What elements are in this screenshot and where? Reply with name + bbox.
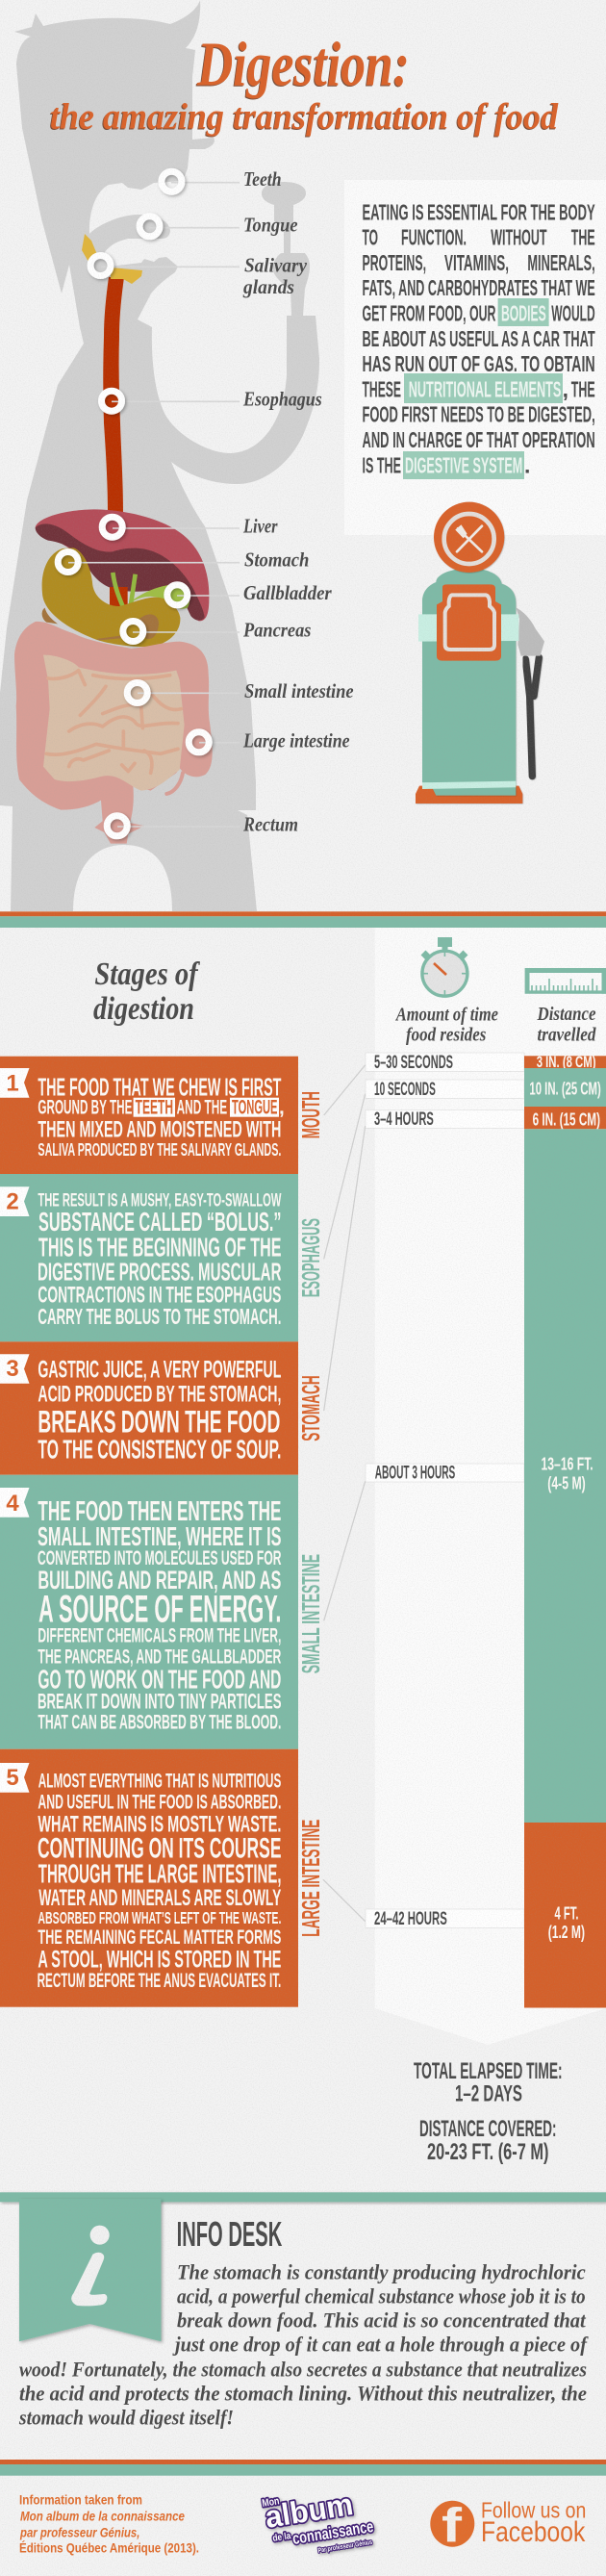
callout rings	[58, 171, 209, 836]
salivary glands	[82, 234, 142, 284]
pump light stripe	[418, 614, 518, 642]
intro paragraph: VITAMINS,	[444, 250, 509, 275]
flag number 3: 3	[6, 1356, 19, 1382]
vertical stage labels: ESOPHAGUS	[298, 1218, 325, 1297]
organ labels: Stomach	[244, 548, 309, 571]
segment 13-16 ft: (4-5 M)	[547, 1473, 586, 1492]
chart: distance column	[524, 1053, 606, 2007]
fork and knife	[456, 525, 482, 551]
source credit: Information taken from	[19, 2492, 142, 2508]
heading: stages of digestion	[93, 956, 201, 1027]
row 5-30 seconds: 5–30 SECONDS	[374, 1053, 453, 1073]
segment 4 ft: (1.2 M)	[548, 1923, 585, 1942]
silhouette body	[0, 0, 319, 911]
title line 2: the amazing transformation of food	[50, 96, 559, 137]
flag number 5: 5	[6, 1765, 19, 1791]
segment 4 ft: 4 FT.	[554, 1903, 579, 1923]
segment 13-16 ft	[524, 1129, 606, 1823]
esophagus	[103, 277, 124, 515]
flag number 2	[0, 1186, 29, 1216]
stage 3 text: ACID PRODUCED BY THE STOMACH,	[38, 1382, 281, 1408]
stage 1 text: ,	[279, 1097, 285, 1119]
flag number 3	[0, 1354, 29, 1384]
organ labels: glands	[242, 275, 294, 298]
info paragraph: break down food. This acid is so concentrated that	[177, 2308, 587, 2332]
fork	[262, 182, 306, 253]
info paragraph: the acid and protects the stomach lining. Without this neutralizer, the	[19, 2381, 587, 2405]
icon: facebook: f	[442, 2499, 462, 2553]
organ callout lines	[68, 183, 240, 827]
info paragraph: stomach would digest itself!	[18, 2405, 234, 2429]
large intestine	[14, 622, 213, 844]
intro paragraph: IS THE	[362, 452, 401, 477]
organ labels: Rectum	[242, 812, 298, 835]
icon: gas pump	[416, 502, 544, 803]
highlight: bodies	[498, 298, 549, 326]
source credit: par professeur Génius,	[19, 2525, 139, 2540]
stage 4 text: THAT CAN BE ABSORBED BY THE BLOOD.	[38, 1712, 281, 1734]
stage 2 text: SUBSTANCE CALLED “BOLUS.”	[38, 1207, 281, 1237]
stomach	[42, 548, 180, 647]
logo: Mon album de la connaissance: de la	[272, 2531, 292, 2544]
pump bottle outline	[445, 595, 494, 650]
title	[50, 29, 559, 137]
stage 1 text: THE FOOD THAT WE CHEW IS FIRST	[38, 1074, 282, 1101]
info paragraph	[18, 2259, 589, 2429]
stage 1 text	[38, 1074, 285, 1160]
column heading: time: food resides	[406, 1025, 487, 1046]
facebook text: Facebook	[481, 2516, 586, 2548]
vertical stage labels: STOMACH	[298, 1375, 325, 1441]
stage 3 text	[38, 1357, 281, 1465]
intro paragraph: PROTEINS,	[362, 250, 426, 275]
heading: stages of digestion: digestion	[93, 991, 194, 1027]
icon: stopwatch	[421, 937, 467, 996]
organ labels: Tongue	[243, 214, 298, 237]
stage 5 text: ABSORBED FROM WHAT’S LEFT OF THE WASTE.	[38, 1908, 281, 1927]
stage 3 text: BREAKS DOWN THE FOOD	[38, 1404, 280, 1439]
organ labels: Salivary	[244, 254, 308, 277]
organ labels: Liver	[242, 514, 278, 537]
stage 4 text: THE PANCREAS, AND THE GALLBLADDER	[38, 1645, 281, 1668]
intro paragraph: THESE	[362, 376, 401, 401]
hand	[272, 253, 310, 316]
stage 3 text: GASTRIC JUICE, A VERY POWERFUL	[38, 1357, 281, 1384]
intro paragraph	[362, 199, 595, 477]
organ labels: Gallbladder	[243, 581, 332, 604]
organ labels: Pancreas	[242, 619, 311, 642]
stage 5 text: ALMOST EVERYTHING THAT IS NUTRITIOUS	[38, 1771, 281, 1793]
stage 5 text: THE REMAINING FECAL MATTER FORMS	[38, 1926, 281, 1949]
flag number 1: 1	[6, 1070, 19, 1096]
pump base	[416, 786, 522, 803]
esophagus lower part	[110, 587, 128, 608]
logo: Mon album de la connaissance: Par professeur Génius	[317, 2539, 373, 2555]
stage 4 text	[38, 1496, 281, 1734]
flag number 5	[0, 1763, 29, 1793]
panel: time column background	[375, 928, 606, 2045]
column heading: distance	[537, 1004, 596, 1046]
intro paragraph: .	[524, 452, 530, 477]
totals	[414, 2058, 563, 2165]
source credit	[19, 2492, 199, 2556]
stage 4 text: A SOURCE OF ENERGY.	[38, 1589, 281, 1631]
highlight: digestive system	[403, 451, 524, 479]
follow text: Follow us on	[481, 2498, 586, 2523]
organ labels: Large intestine	[242, 729, 350, 752]
panel: stage 2 esophagus	[0, 1174, 298, 1341]
panel: stage 5 large intestine	[0, 1749, 298, 2007]
column heading: distance: Distance	[537, 1004, 596, 1025]
stage 5 text: A STOOL, WHICH IS STORED IN THE	[38, 1947, 281, 1973]
stage 4 text: BUILDING AND REPAIR, AND AS	[38, 1565, 281, 1594]
panel: digestive organs	[14, 234, 213, 844]
icon: ruler	[525, 968, 606, 994]
row 24-42 hours: 24–42 HOURS	[374, 1909, 447, 1929]
highlight: teeth	[134, 1098, 175, 1117]
segment 10 in	[524, 1068, 606, 1107]
panel: info desk	[0, 2192, 606, 2429]
organ labels: Small intestine	[244, 679, 354, 702]
small intestine	[43, 655, 185, 791]
organ labels	[242, 167, 354, 835]
highlight: nutritional elements	[404, 373, 563, 403]
stage 1 text: TONGUE	[232, 1097, 278, 1119]
stage 4 text: GO TO WORK ON THE FOOD AND	[38, 1664, 281, 1694]
stage 2 text: THIS IS THE BEGINNING OF THE	[38, 1233, 281, 1262]
gallbladder	[133, 582, 189, 609]
stage 1 text: THEN MIXED AND MOISTENED WITH	[38, 1117, 281, 1143]
stage 1 text: TEETH	[136, 1097, 173, 1119]
row about 3 hours: ABOUT 3 HOURS	[375, 1464, 455, 1484]
stage 1 text: SALIVA PRODUCED BY THE SALIVARY GLANDS.	[38, 1139, 281, 1160]
stage 2 text	[38, 1190, 282, 1329]
icon: letter i	[71, 2226, 110, 2306]
title line 1: Digestion:	[196, 29, 410, 100]
stage 2 text: CARRY THE BOLUS TO THE STOMACH.	[38, 1304, 281, 1329]
pump orange panel	[437, 584, 501, 661]
panel: stage 4 small intestine	[0, 1475, 298, 1749]
totals: 1–2 DAYS	[455, 2080, 522, 2106]
stage 1 text: GROUND BY THE	[38, 1097, 132, 1119]
logo: Mon album de la connaissance: connaissance	[291, 2517, 375, 2548]
info paragraph: The stomach is constantly producing hydrochloric	[177, 2259, 586, 2283]
stage 4 text: CONVERTED INTO MOLECULES USED FOR	[38, 1547, 281, 1569]
pump hose	[525, 657, 539, 777]
vertical stage labels	[298, 1091, 325, 1937]
pancreas	[42, 608, 159, 640]
stage 2 text: DIGESTIVE PROCESS. MUSCULAR	[38, 1258, 282, 1287]
chart: time rows	[366, 1053, 524, 1929]
facebook link	[430, 2498, 586, 2553]
highlight: tongue	[230, 1098, 279, 1117]
bile ducts	[113, 573, 136, 608]
stage 3 text: TO THE CONSISTENCY OF SOUP.	[38, 1435, 281, 1465]
organ labels: Teeth	[243, 167, 281, 191]
column heading: time	[394, 1005, 498, 1046]
liver	[36, 509, 209, 621]
pump bottom stripe	[422, 781, 516, 789]
panel: stage 1 mouth	[0, 1057, 298, 1174]
organs group	[14, 509, 213, 844]
info bar	[0, 2192, 606, 2202]
intro paragraph: FUNCTION.	[401, 225, 467, 250]
flag number 2: 2	[6, 1189, 19, 1215]
intro paragraph: GET FROM FOOD, OUR	[362, 300, 496, 325]
flag number 4	[0, 1488, 29, 1518]
stage 5 text: CONTINUING ON ITS COURSE	[38, 1833, 281, 1865]
stage 4 text: SMALL INTESTINE, WHERE IT IS	[38, 1521, 281, 1551]
vertical stage labels: SMALL INTESTINE	[298, 1554, 325, 1673]
row 3-4 hours: 3–4 HOURS	[374, 1109, 434, 1130]
intro paragraph: ,	[563, 376, 568, 401]
icon: facebook	[430, 2499, 474, 2553]
connector lines	[323, 1065, 366, 1922]
source credit: Éditions Québec Amérique (2013).	[19, 2540, 199, 2556]
section divider 2	[0, 2460, 606, 2476]
panel: introduction text	[344, 180, 606, 535]
flag number 4: 4	[6, 1491, 19, 1517]
stage 5 text: THROUGH THE LARGE INTESTINE,	[38, 1859, 281, 1889]
logo: Mon album de la connaissance	[262, 2487, 375, 2555]
stage 5 text: AND USEFUL IN THE FOOD IS ABSORBED.	[38, 1791, 281, 1813]
stage 2 text: CONTRACTIONS IN THE ESOPHAGUS	[38, 1282, 281, 1308]
stage 5 text: WATER AND MINERALS ARE SLOWLY	[38, 1885, 281, 1911]
stage 5 text: RECTUM BEFORE THE ANUS EVACUATES IT.	[38, 1970, 281, 1992]
source credit: Mon album de la connaissance	[20, 2508, 185, 2523]
intro paragraph: BODIES	[501, 300, 546, 325]
column heading: time: Amount of time	[394, 1005, 498, 1026]
stage 4 text: THE FOOD THEN ENTERS THE	[38, 1496, 281, 1527]
stage 5 text: WHAT REMAINS IS MOSTLY WASTE.	[38, 1811, 281, 1837]
panel: stage 3 stomach	[0, 1341, 298, 1475]
row 3-4 hours	[366, 1109, 524, 1130]
logo: Mon album de la connaissance: album	[263, 2487, 355, 2535]
stage 4 text: DIFFERENT CHEMICALS FROM THE LIVER,	[38, 1625, 281, 1647]
info heading: INFO DESK	[177, 2214, 282, 2254]
heading: stages of digestion: Stages of	[94, 956, 201, 992]
info ribbon	[19, 2199, 162, 2341]
intro panel background	[344, 180, 606, 535]
totals: 20-23 FT. (6-7 M)	[427, 2139, 548, 2165]
panel: human silhouette	[0, 0, 319, 911]
vertical stage labels: MOUTH	[298, 1091, 325, 1138]
intro paragraph: TO	[362, 225, 378, 250]
column heading: distance: travelled	[537, 1025, 596, 1046]
vertical stage labels: LARGE INTESTINE	[298, 1820, 325, 1937]
intestinal folds	[46, 671, 181, 773]
stage 5 text	[38, 1771, 281, 1992]
stage 4 text: BREAK IT DOWN INTO TINY PARTICLES	[38, 1690, 281, 1714]
liver shadow lobe	[36, 523, 205, 621]
pump head	[434, 502, 504, 573]
pump body	[422, 569, 516, 796]
row 10 seconds: 10 SECONDS	[374, 1080, 436, 1100]
flag number 1	[0, 1068, 29, 1098]
segment 4 ft	[524, 1823, 606, 2007]
pump nozzle	[517, 608, 544, 656]
stage 2 text: THE RESULT IS A MUSHY, EASY-TO-SWALLOW	[38, 1190, 282, 1211]
organ labels: Esophagus	[242, 388, 322, 411]
section divider 1	[0, 911, 606, 928]
stage 1 text: AND THE	[177, 1097, 227, 1119]
intro paragraph: WITHOUT	[491, 225, 546, 250]
logo: Mon album de la connaissance: Mon	[262, 2495, 280, 2510]
plate ring	[444, 514, 494, 564]
appendix	[166, 773, 183, 794]
